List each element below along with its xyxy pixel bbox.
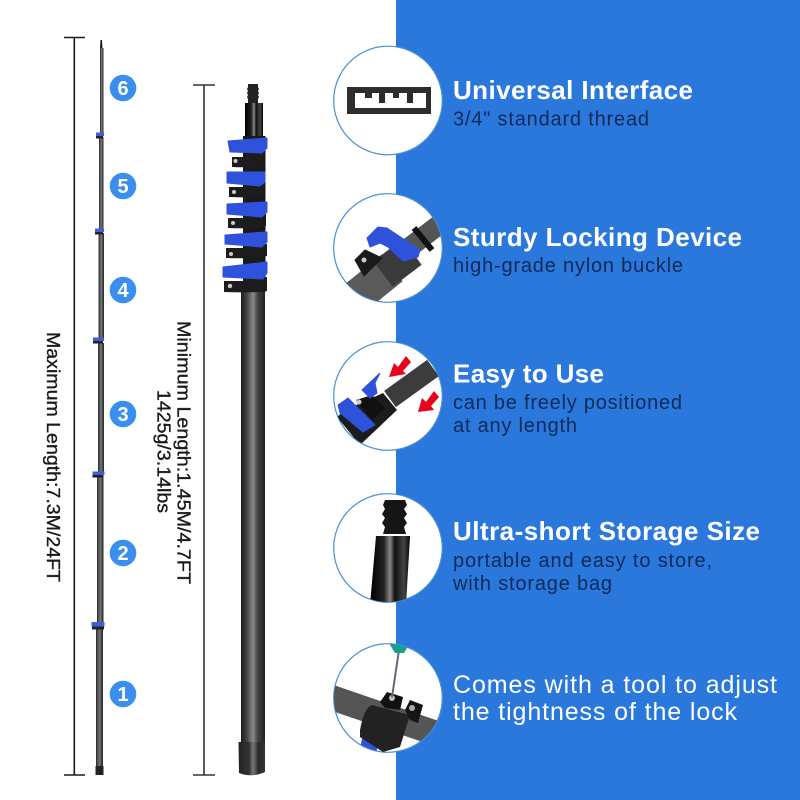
section number badges: 5 bbox=[117, 176, 129, 198]
maximum length dimension line bbox=[64, 38, 85, 775]
feature: sturdy locking device bbox=[453, 222, 742, 277]
icon: red arrow upper bbox=[389, 356, 411, 377]
feature: ultra-short storage size: portable and easy to store, bbox=[453, 550, 712, 572]
icon: red arrow lower bbox=[418, 391, 439, 412]
section number badges: 6 bbox=[117, 78, 129, 100]
feature: ultra-short storage size: with storage bag bbox=[452, 573, 612, 595]
collapsed telescopic pole bbox=[223, 84, 267, 775]
section number badges: 1 bbox=[117, 684, 129, 706]
label: minimum length: Minimum Length:1.45M/4.7FT bbox=[174, 321, 194, 584]
circle: storage size bbox=[334, 494, 442, 605]
label: weight: 1425g/3.14lbs bbox=[154, 390, 174, 513]
section number badges: 4 bbox=[117, 280, 129, 302]
feature: easy to use bbox=[453, 358, 682, 437]
feature: universal interface: 3/4" standard thread bbox=[453, 108, 649, 130]
feature: ultra-short storage size: Ultra-short Storage Size bbox=[453, 516, 760, 546]
minimum length dimension line bbox=[193, 85, 215, 775]
circle: adjustment tool bbox=[330, 640, 442, 754]
feature: sturdy locking device: high-grade nylon buckle bbox=[453, 255, 683, 277]
section number badges bbox=[110, 75, 136, 707]
extended pole with six sections bbox=[92, 40, 104, 775]
label: maximum length: Maximum Length:7.3M/24FT bbox=[43, 332, 64, 582]
feature: universal interface bbox=[453, 75, 693, 130]
section number badges: 3 bbox=[117, 404, 129, 426]
feature: easy to use: can be freely positioned bbox=[453, 392, 682, 414]
icon: thread profile bbox=[347, 87, 431, 114]
feature: adjustment tool note: the tightness of the lock bbox=[453, 698, 738, 726]
feature: adjustment tool note: Comes with a tool to adjust bbox=[453, 671, 777, 699]
circle: easy to use bbox=[334, 342, 442, 450]
feature: ultra-short storage size bbox=[452, 516, 760, 595]
section number badges: 2 bbox=[117, 543, 129, 565]
circle: locking device bbox=[334, 194, 442, 306]
feature: universal interface: Universal Interface bbox=[453, 75, 693, 105]
feature: easy to use: at any length bbox=[453, 415, 577, 437]
blue background panel bbox=[396, 0, 800, 800]
feature: adjustment tool note bbox=[453, 671, 777, 726]
feature: easy to use: Easy to Use bbox=[453, 358, 604, 388]
circle: thread icon bbox=[334, 46, 442, 155]
feature: sturdy locking device: Sturdy Locking Device bbox=[453, 222, 742, 252]
pole clamps bbox=[223, 138, 267, 292]
